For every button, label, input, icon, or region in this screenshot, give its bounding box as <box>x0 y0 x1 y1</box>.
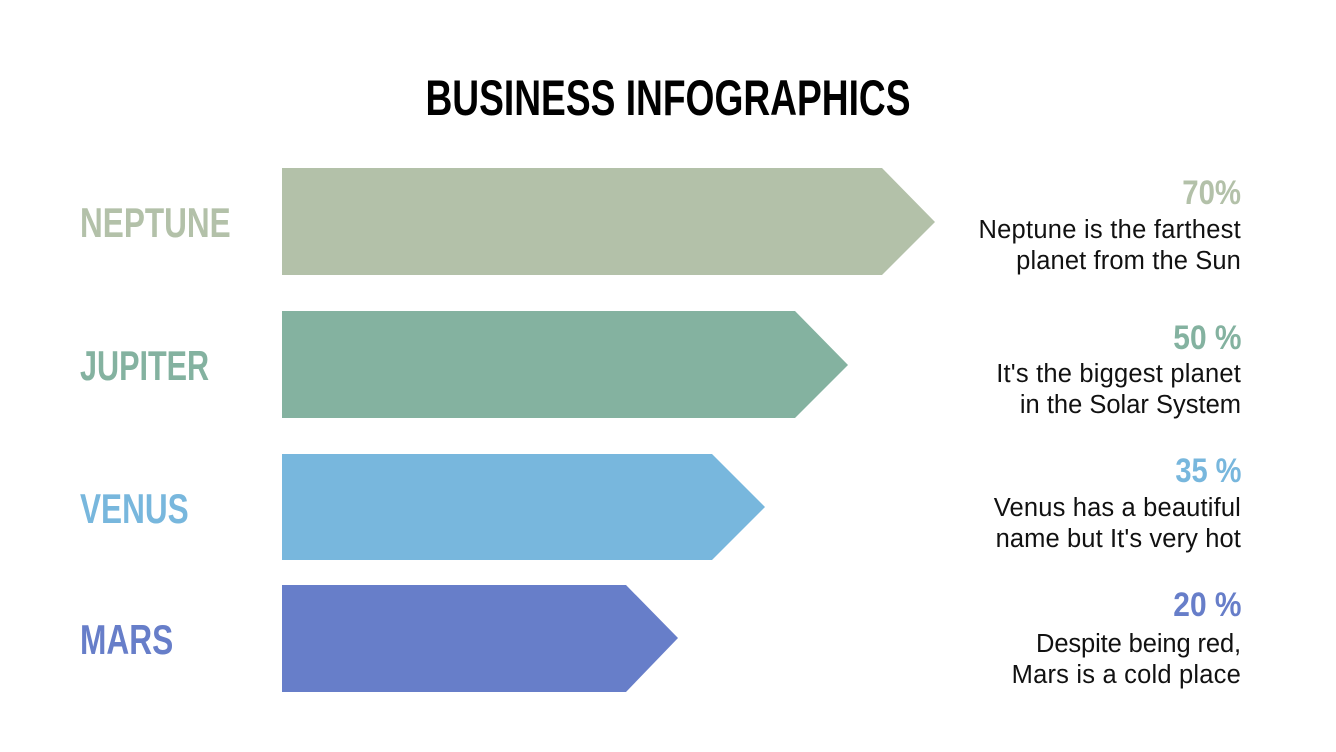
description: Neptune: Neptune is the farthest <box>978 216 1241 244</box>
description: Neptune: planet from the Sun <box>1016 247 1241 275</box>
label: Mars: MARS <box>80 616 173 663</box>
percent: Jupiter: 50 % <box>1173 319 1241 357</box>
description: Mars: Despite being red, <box>1036 630 1241 658</box>
description: Jupiter: in the Solar System <box>1020 391 1241 419</box>
description: Venus <box>994 494 1241 553</box>
label: Neptune: NEPTUNE <box>80 199 231 246</box>
arrow: Venus <box>282 454 765 560</box>
description: Venus: name but It's very hot <box>996 525 1241 553</box>
description: Neptune <box>978 216 1241 275</box>
arrow: Mars <box>282 585 678 692</box>
title: BUSINESS INFOGRAPHICS <box>425 70 911 126</box>
description: Venus: Venus has a beautiful <box>994 494 1241 522</box>
description: Jupiter: It's the biggest planet <box>996 360 1241 388</box>
label: Jupiter: JUPITER <box>80 342 209 389</box>
description: Mars <box>1012 630 1241 689</box>
percent: Mars: 20 % <box>1173 586 1241 624</box>
description: Jupiter <box>996 360 1241 419</box>
percent: Neptune: 70% <box>1182 174 1241 212</box>
label: Venus: VENUS <box>80 485 189 532</box>
arrow: Jupiter <box>282 311 848 418</box>
arrow: Neptune <box>282 168 935 275</box>
percent: Venus: 35 % <box>1175 452 1241 490</box>
description: Mars: Mars is a cold place <box>1012 661 1241 689</box>
